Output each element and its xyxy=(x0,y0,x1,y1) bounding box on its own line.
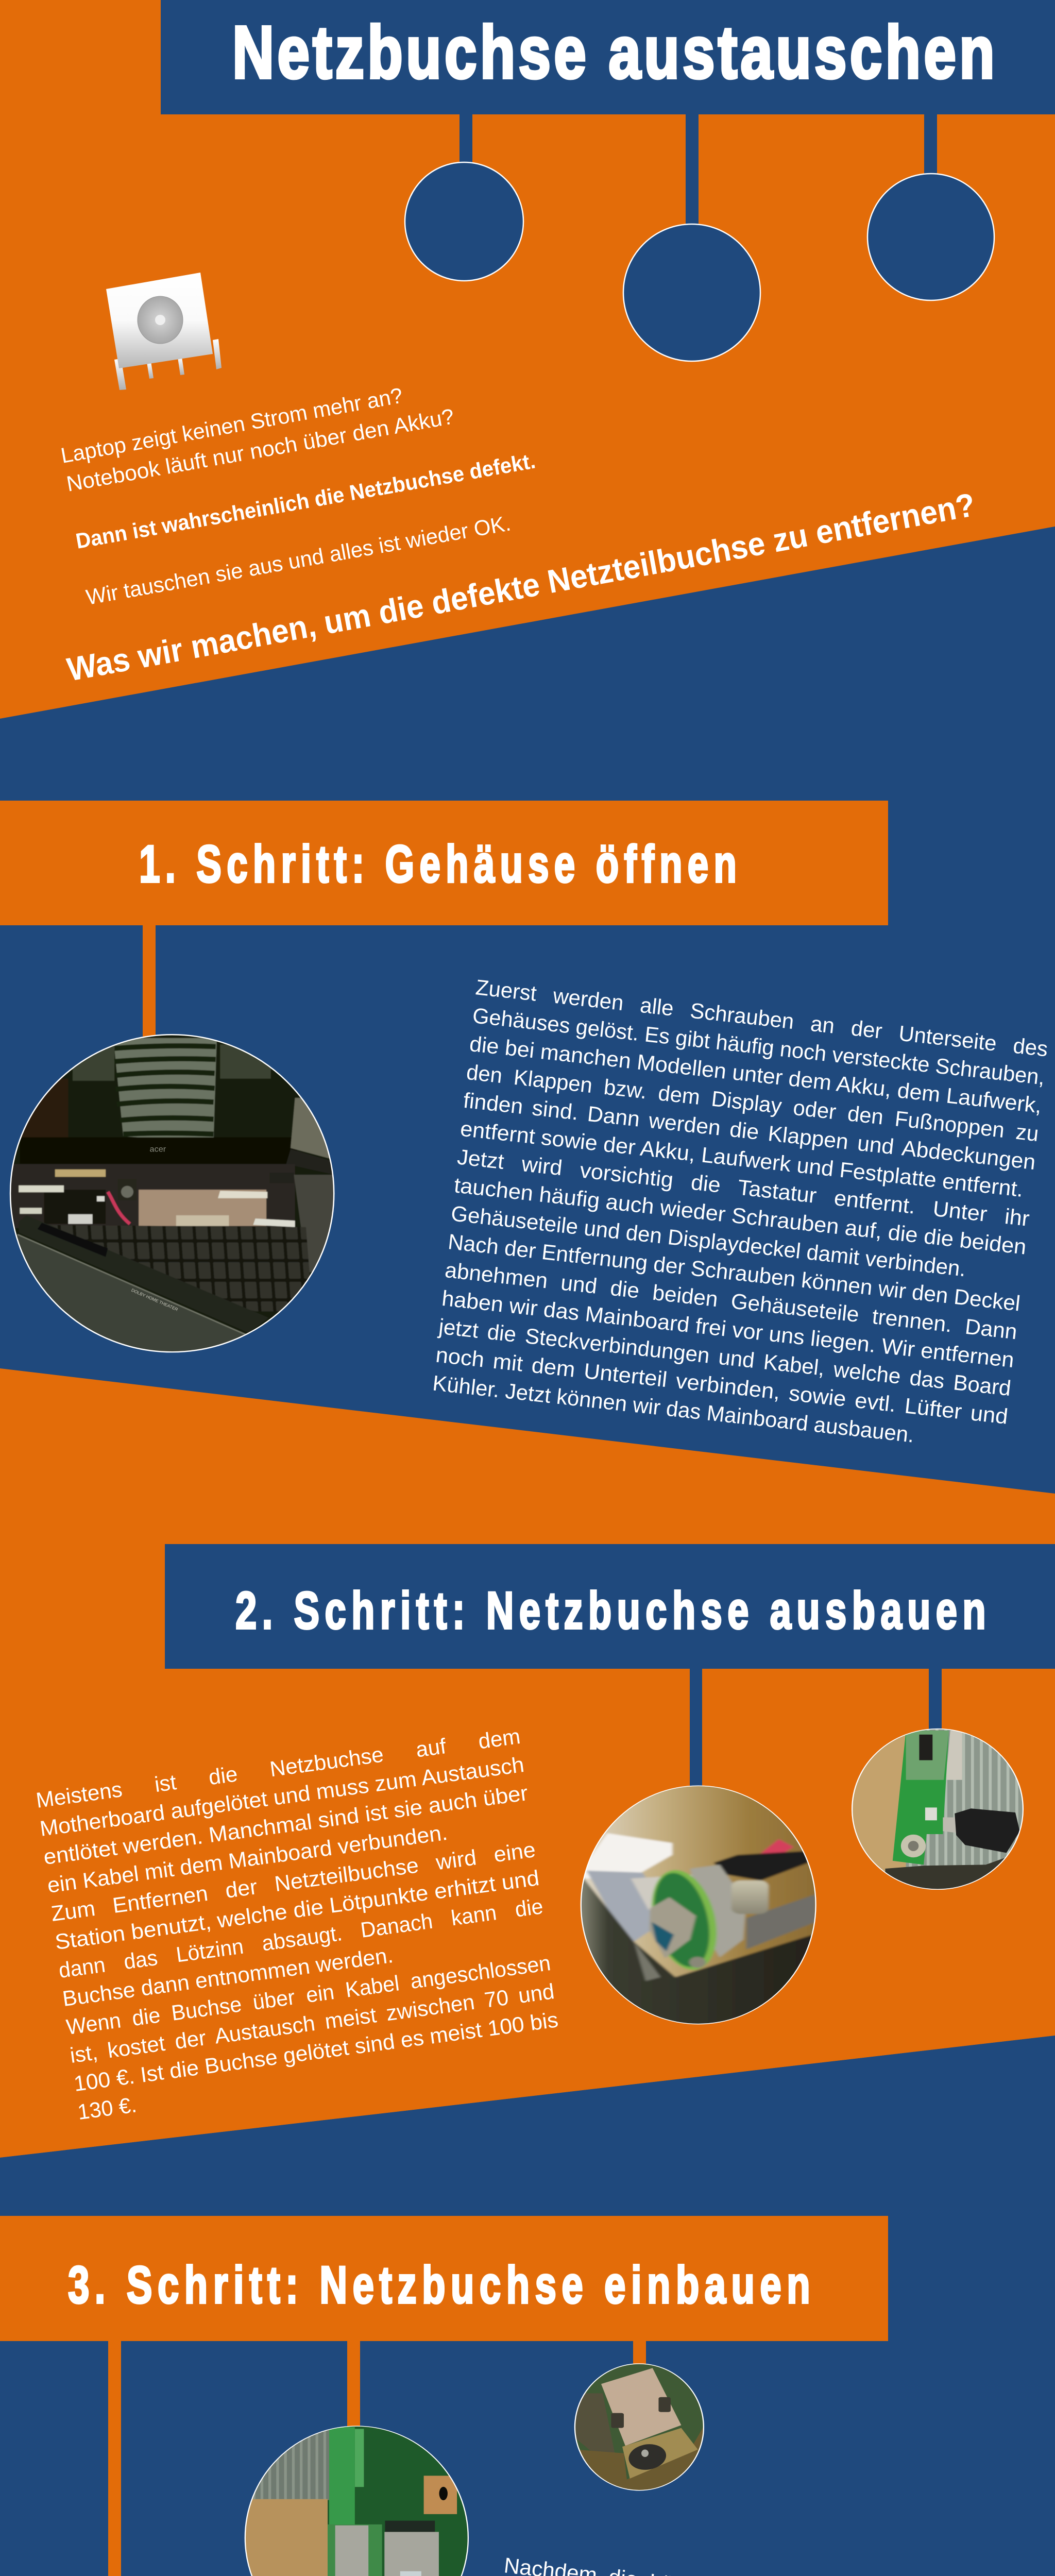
step 2 text: Motherboard aufgelötet und muss zum Austausch xyxy=(38,1752,525,1841)
background: top orange section xyxy=(0,0,1055,719)
step 1 text: die bei manchen Modellen unter dem Akku, dem Laufwerk, xyxy=(468,1031,1043,1117)
intro text: Dann ist wahrscheinlich die Netzbuchse defekt. xyxy=(74,448,537,553)
step 1 banner xyxy=(0,801,888,925)
step 2 text xyxy=(35,1724,564,2124)
intro question heading: Was wir machen, um die defekte Netzteilbuchse zu entfernen? xyxy=(64,486,978,688)
intro text: Laptop zeigt keinen Strom mehr an? xyxy=(59,383,404,468)
step 2 text: Meistens ist die Netzbuchse auf dem xyxy=(35,1724,522,1812)
step 1 heading: 1. Schritt: Gehäuse öffnen xyxy=(139,835,742,893)
step 2 connector 1 xyxy=(690,1669,702,1787)
step 1 text xyxy=(431,975,1049,1457)
step 1 text: haben wir das Mainboard frei vor uns liegen. Wir entfernen xyxy=(440,1286,1015,1372)
step 2 text: entlötet werden. Manchmal sind ist sie auch über xyxy=(42,1781,530,1869)
background: step 2 orange section xyxy=(0,1368,1055,2158)
background: step 3 blue section xyxy=(0,2036,1055,2576)
step 1 text: Kühler. Jetzt können wir das Mainboard ausbauen. xyxy=(432,1371,915,1447)
step 3 connector 1 xyxy=(108,2341,121,2576)
step 2 text: 130 €. xyxy=(76,2092,138,2124)
step 1 text: tauchen häufig auch wieder Schrauben auf, die die beiden xyxy=(453,1173,1028,1259)
step 2 text: Zum Entfernen der Netzteilbuchse wird eine xyxy=(49,1837,537,1926)
step 2 connector 2 xyxy=(929,1669,942,1730)
step 1 text: Nach der Entfernung der Schrauben können wir den Deckel xyxy=(447,1229,1022,1315)
photo: opened laptop xyxy=(9,1034,335,1353)
background: step 1 blue section xyxy=(0,527,1055,1494)
step 3 banner xyxy=(0,2216,888,2341)
photo: opened laptop: DOLBY HOME THEATER xyxy=(130,1287,179,1312)
intro text: Notebook läuft nur noch über den Akku? xyxy=(64,404,456,496)
photo: removed jack xyxy=(580,1786,816,2025)
step 3 connector 3 xyxy=(633,2341,646,2365)
step 2 text: Buchse dann entnommen werden. xyxy=(61,1943,395,2011)
photo: opened laptop: acer xyxy=(150,1145,166,1154)
step 1 text: Gehäuses gelöst. Es gibt häufig noch versteckte Schrauben, xyxy=(471,1003,1046,1089)
step 1 text: noch mit dem Unterteil verbinden, sowie evtl. Lüfter und xyxy=(435,1343,1009,1429)
step 2 text: 100 €. Ist die Buchse gelötet sind es meist 100 bis xyxy=(72,2007,559,2096)
step 1 connector xyxy=(143,925,156,1038)
pendant circle 1 xyxy=(405,114,523,281)
intro text xyxy=(59,383,537,609)
step 1 text: Zuerst werden alle Schrauben an der Unterseite des xyxy=(474,975,1049,1061)
step 1 text: den Klappen bzw. dem Display oder den Fußnoppen zu xyxy=(465,1060,1040,1146)
pendant circle 3 xyxy=(867,114,994,300)
photo: soldered board xyxy=(243,2425,473,2576)
pendant circle 2 xyxy=(623,114,760,361)
step 2 banner xyxy=(165,1544,1055,1669)
photos: removed jack and board xyxy=(572,1726,1027,2030)
step 2 text: ist, kostet der Austausch meist zwischen 70 und xyxy=(69,1979,556,2067)
step 2 text: Station benutzt, welche die Lötpunkte erhitzt und xyxy=(54,1866,541,1954)
title banner xyxy=(161,0,1055,114)
step 2 text: Wenn die Buchse über ein Kabel angeschlossen xyxy=(65,1951,552,2039)
step 2 text: dann das Lötzinn absaugt. Danach kann die xyxy=(57,1894,544,1982)
step 1 text: finden sind. Dann werden die Klappen und Abdeckungen xyxy=(462,1088,1037,1174)
step 1 text: abnehmen und die beiden Gehäuseteile trennen. Dann xyxy=(444,1258,1018,1344)
photo: board with plug xyxy=(850,1726,1027,1892)
step 1 text: Gehäuseteile und den Displaydeckel damit verbinden. xyxy=(450,1201,967,1281)
step 1 text: Jetzt wird vorsichtig die Tastatur entfernt. Unter ihr xyxy=(456,1144,1031,1231)
icon: power jack xyxy=(106,273,222,390)
step 1 text: entfernt sowie der Akku, Laufwerk und Festplatte entfernt. xyxy=(459,1116,1025,1201)
step 2 text: ein Kabel mit dem Mainboard verbunden. xyxy=(46,1820,449,1897)
intro text: Wir tauschen sie aus und alles ist wieder OK. xyxy=(84,511,513,609)
step 3 connector 2 xyxy=(347,2341,360,2428)
photos: board and jack close-up xyxy=(243,2362,705,2576)
photo: power jack close-up xyxy=(572,2362,705,2492)
step 1 text: jetzt die Steckverbindungen und Kabel, welche das Board xyxy=(436,1314,1012,1400)
